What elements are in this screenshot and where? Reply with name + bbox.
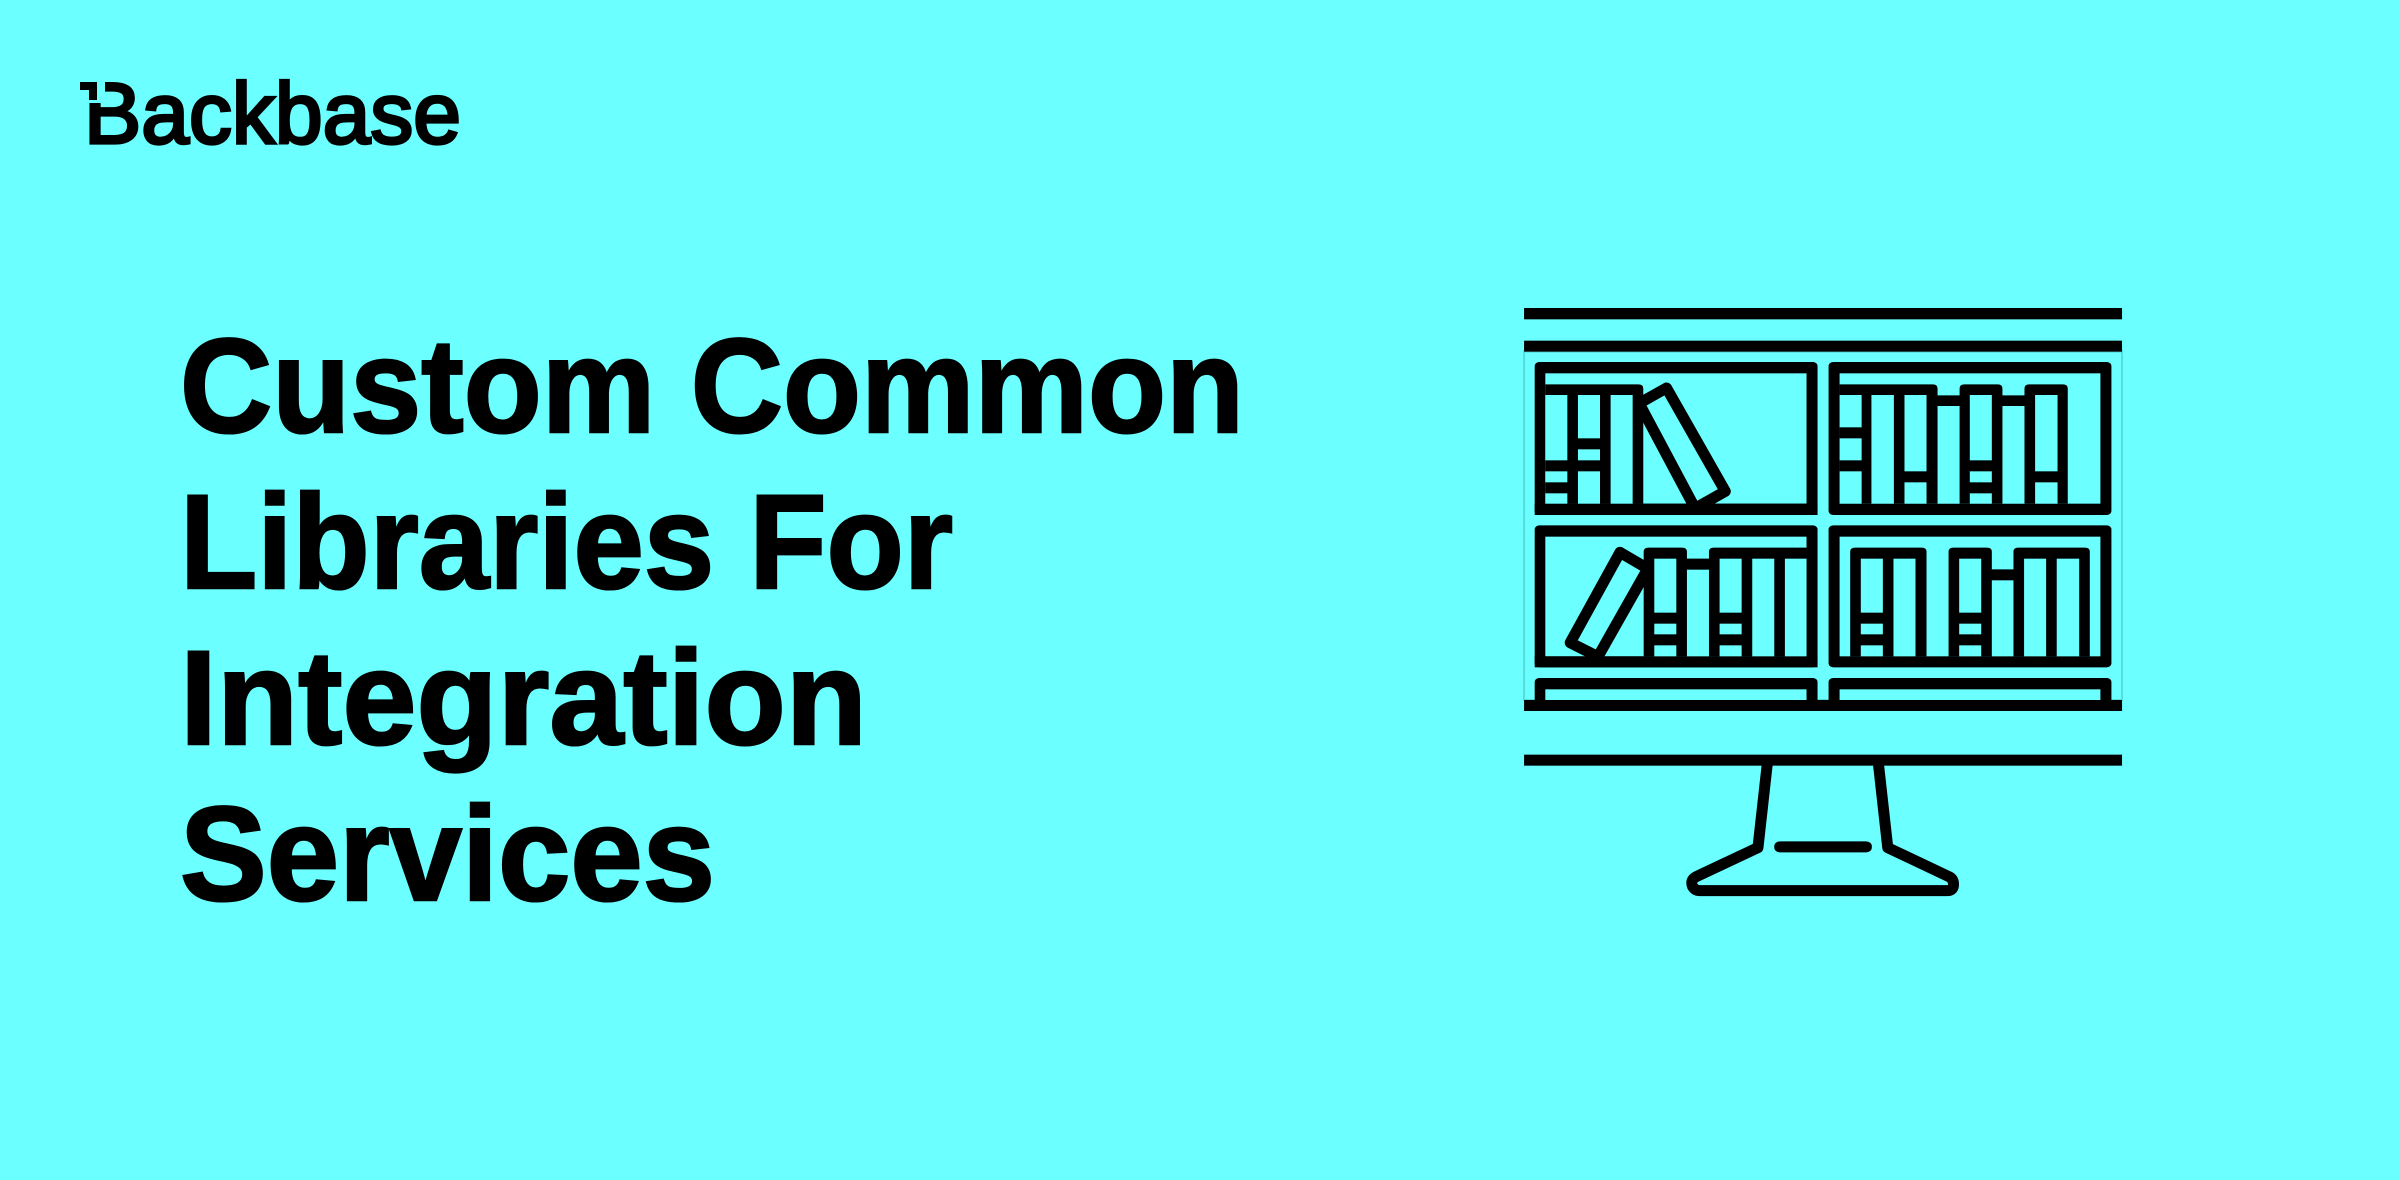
shelf: middle right: [1829, 525, 2111, 667]
title: Custom Common: [180, 312, 1244, 461]
shelf: top left: [1535, 362, 1818, 515]
title: Services: [180, 780, 715, 929]
shelf: bottom left: [1535, 678, 1818, 705]
shelf: middle left: [1535, 525, 1818, 667]
shelf: bottom right: [1829, 678, 2111, 705]
title: Integration: [180, 624, 867, 773]
shelf: top right: [1829, 362, 2111, 515]
title: Libraries For: [180, 468, 953, 617]
monitor top bars: [1524, 308, 2122, 352]
monitor lower screen edge: [1524, 700, 2122, 711]
icon: computer monitor showing a bookshelf: [1524, 308, 2122, 891]
title: [180, 312, 1244, 929]
monitor bottom bar: [1524, 755, 2122, 766]
logo: Backbase: Backbase: [84, 66, 461, 162]
stand handle: [1774, 841, 1872, 852]
monitor stand: [1692, 763, 1953, 891]
